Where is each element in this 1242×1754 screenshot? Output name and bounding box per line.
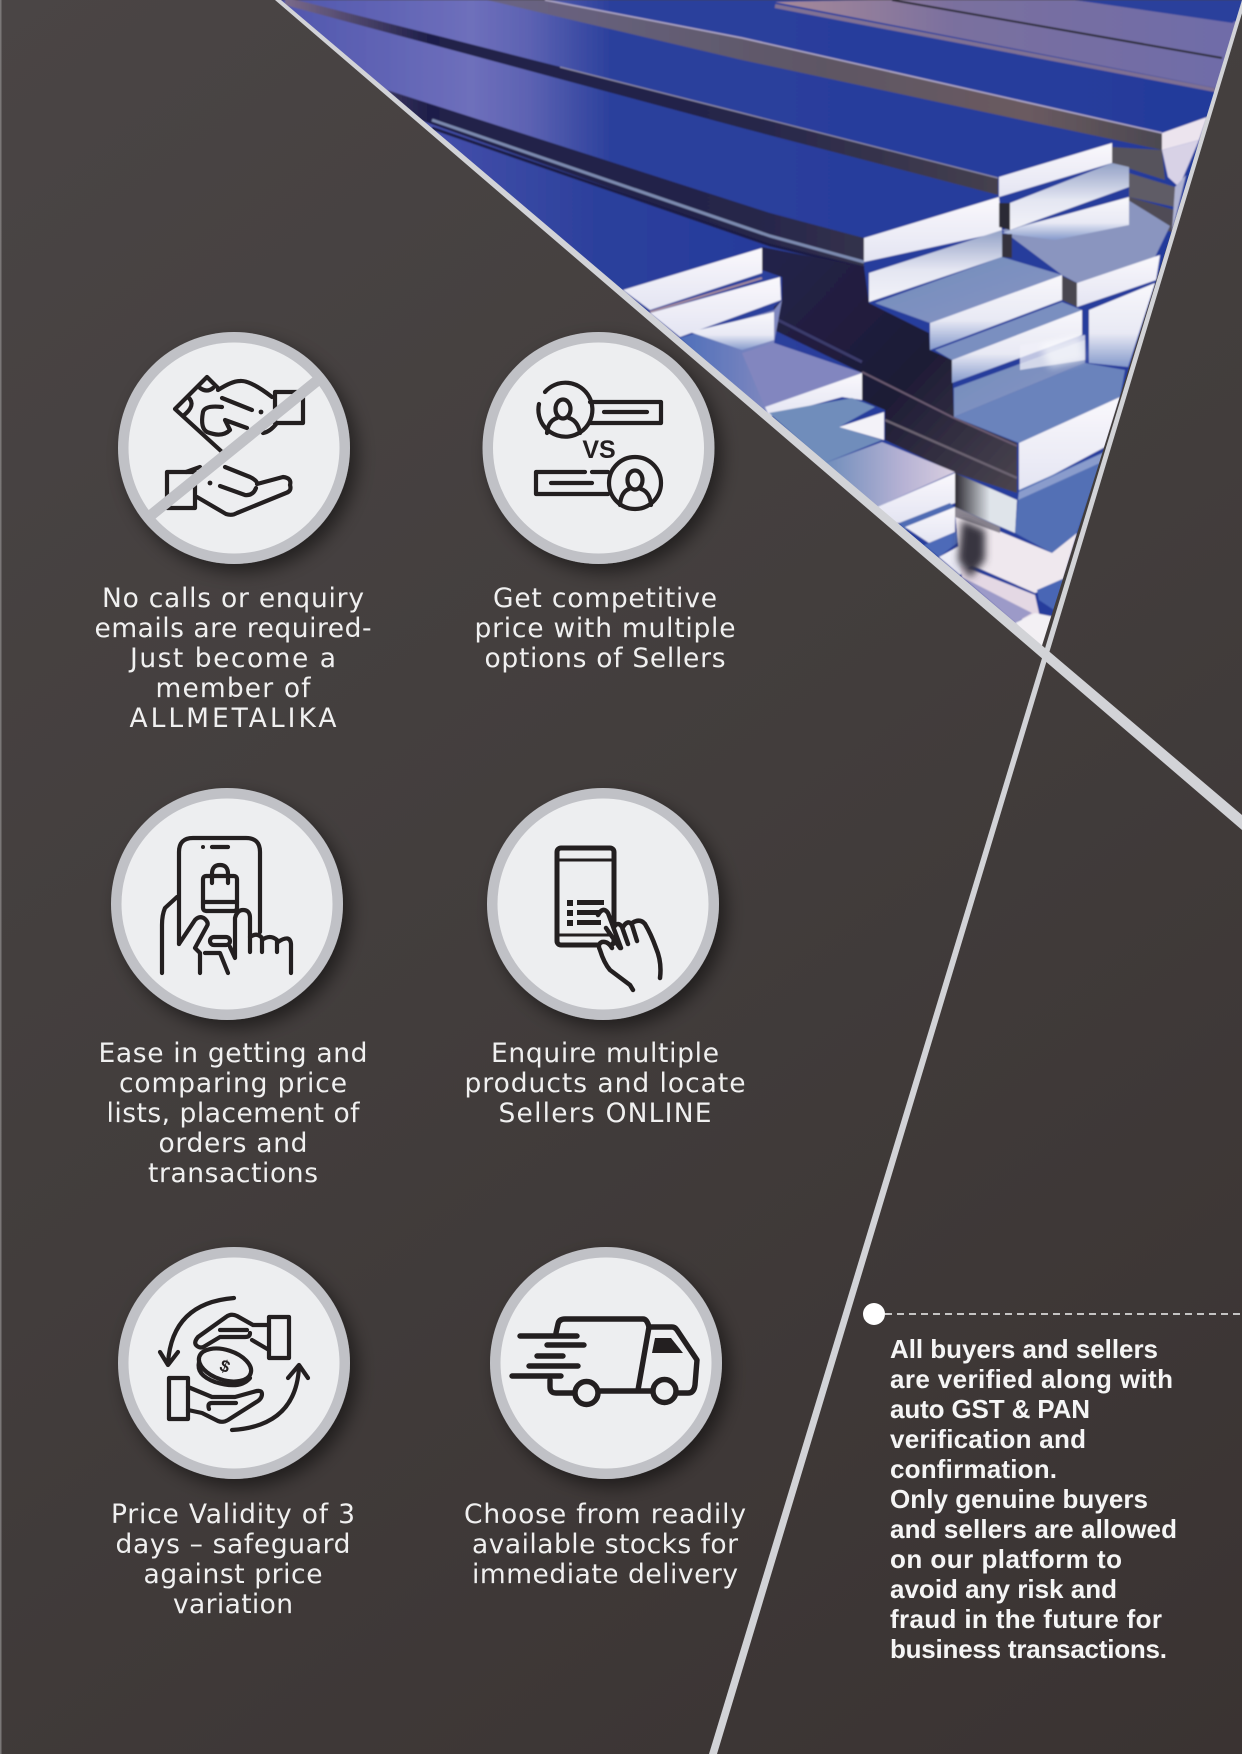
photo: stacked metal bars [270, 0, 1242, 660]
block G [1010, 163, 1129, 230]
callout text [890, 1334, 1177, 1664]
caption [464, 1499, 746, 1590]
caption: transactions [148, 1158, 318, 1189]
callout text: auto GST & PAN [890, 1394, 1090, 1424]
icon: two sellers versus [482, 332, 714, 564]
caption: ALLMETALIKA [130, 703, 336, 734]
icon: hand tapping list on phone [487, 788, 719, 1020]
icon: hand holding phone with shopping bag [111, 788, 343, 1020]
callout text: All buyers and sellers [890, 1334, 1158, 1364]
icon: hands around coin with arrows [118, 1247, 350, 1479]
caption: variation [173, 1589, 293, 1620]
icon: hands exchanging money, crossed out [118, 332, 350, 564]
caption: options of Sellers [484, 643, 726, 674]
callout text: confirmation. [890, 1454, 1057, 1484]
feature: price validity [111, 1247, 355, 1620]
top lavender band [775, 0, 1240, 88]
band C [487, 0, 1162, 150]
callout text: on our platform to [890, 1544, 1122, 1574]
callout text: avoid any risk and [890, 1574, 1117, 1604]
caption: Just become a [128, 643, 336, 674]
callout marker and dashed leader [863, 1303, 1242, 1325]
left bars [623, 248, 762, 310]
icon: two sellers versus: VS [582, 436, 616, 464]
caption: comparing price [119, 1068, 347, 1099]
callout text: are verified along with [890, 1364, 1173, 1394]
caption: Choose from readily [464, 1499, 746, 1530]
band A [285, 0, 998, 195]
feature: no calls or enquiry emails [94, 332, 372, 734]
caption [111, 1499, 355, 1620]
dark stack [762, 247, 1017, 493]
block E [869, 230, 1002, 302]
caption [94, 583, 372, 734]
callout text: fraud in the future for [890, 1604, 1162, 1634]
feature: competitive price [474, 332, 736, 674]
callout text: Only genuine buyers [890, 1484, 1148, 1514]
caption: Ease in getting and [98, 1038, 368, 1069]
caption: immediate delivery [472, 1559, 738, 1590]
feature: enquire multiple products [464, 788, 746, 1129]
caption: No calls or enquiry [102, 583, 364, 614]
callout text: and sellers are allowed [890, 1514, 1177, 1544]
callout: verification note [863, 1303, 1242, 1664]
caption: Price Validity of 3 [111, 1499, 355, 1530]
big white face [1019, 397, 1120, 493]
band B [387, 90, 864, 267]
feature: ready stock delivery [464, 1247, 746, 1590]
icon: fast delivery truck [490, 1247, 722, 1479]
caption [464, 1038, 746, 1129]
block J [935, 302, 1082, 360]
icon: hands around coin with arrows: $ [217, 1356, 233, 1377]
caption [98, 1038, 368, 1189]
caption: Sellers ONLINE [498, 1098, 712, 1129]
caption: orders and [158, 1128, 308, 1159]
caption: days – safeguard [116, 1529, 350, 1560]
caption: price with multiple [474, 613, 736, 644]
diagonal line from top right to bottom [709, 0, 1242, 1754]
caption [474, 583, 736, 674]
caption: emails are required- [94, 613, 372, 644]
caption: member of [156, 673, 311, 704]
block F [1002, 200, 1170, 283]
callout text: verification and [890, 1424, 1086, 1454]
feature: ease of comparing price lists [98, 788, 368, 1189]
diagonal line from top to right edge [275, 0, 1242, 830]
caption: Enquire multiple [491, 1038, 719, 1069]
caption: lists, placement of [106, 1098, 360, 1129]
caption: products and locate [464, 1068, 746, 1099]
caption: against price [144, 1559, 322, 1590]
white bar ends [864, 197, 1002, 262]
lower right [1015, 452, 1104, 553]
caption: Get competitive [493, 583, 717, 614]
caption: available stocks for [472, 1529, 738, 1560]
callout text: business transactions. [890, 1634, 1167, 1664]
